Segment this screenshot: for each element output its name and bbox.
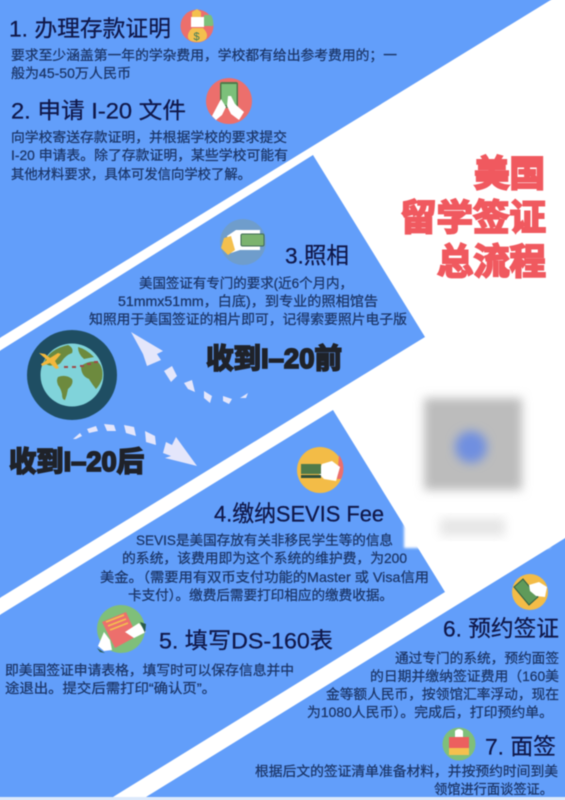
label: after I-20: 收到I–20后 bbox=[9, 446, 144, 477]
icon: filling form bbox=[97, 605, 146, 653]
text: step 1 bbox=[11, 47, 397, 81]
icon: globe with plane bbox=[27, 330, 117, 420]
text: step 3 bbox=[89, 275, 407, 327]
step 5 bbox=[5, 605, 333, 696]
panel: top blue, steps 1-2 bbox=[0, 0, 565, 344]
text: step 4: 的系统，该费用即为这个系统的维护费，为200 bbox=[122, 550, 407, 566]
text: step 5 bbox=[5, 662, 294, 696]
heading: step 2: 2. 申请 I-20 文件 bbox=[11, 98, 186, 124]
icon: money bag: $ bbox=[194, 31, 200, 43]
text: step 7: 根据后文的签证清单准备材料，并按预约时间到美 bbox=[255, 763, 558, 779]
text: step 7 bbox=[255, 763, 558, 797]
text: step 4: 美金。（需要用有双币支付功能的Master 或 Visa信用 bbox=[100, 570, 429, 585]
title: 总流程 bbox=[437, 241, 546, 282]
step 1 bbox=[9, 9, 397, 81]
label: before I-20: 收到I–20前 bbox=[206, 343, 342, 374]
step 4 bbox=[100, 447, 429, 603]
icon: bag bbox=[442, 728, 476, 760]
icon: phone in hands bbox=[206, 78, 252, 124]
arrow: up to step 3 bbox=[131, 332, 248, 404]
icon: hand holding photo bbox=[220, 219, 266, 265]
text: step 2: 其他材料要求，具体可发信向学校了解。 bbox=[11, 166, 251, 182]
icon: cash in hand bbox=[512, 574, 548, 610]
panel: middle blue, step 3 bbox=[0, 155, 425, 604]
text: step 4: 卡支付）。缴费后需要打印相应的缴费收据。 bbox=[128, 587, 393, 603]
text: step 1: 要求至少涵盖第一年的学杂费用，学校都有给出参考费用的；一 bbox=[11, 47, 397, 64]
text: step 6 bbox=[307, 650, 559, 720]
QR code area (blurred) bbox=[404, 392, 550, 548]
text: step 3: 美国签证有专门的要求(近6个月内， bbox=[139, 275, 353, 291]
heading: step 4: 4.缴纳SEVIS Fee bbox=[214, 502, 384, 526]
text: step 2: 向学校寄送存款证明，并根据学校的要求提交 bbox=[11, 129, 287, 145]
title: 美国 bbox=[474, 153, 545, 194]
text: step 6: 通过专门的系统，预约面签 bbox=[395, 650, 559, 666]
text: step 6: 金等额人民币，按领馆汇率浮动，现在 bbox=[326, 686, 559, 702]
text: step 5: 即美国签证申请表格，填写时可以保存信息并中 bbox=[5, 662, 294, 678]
text: step 3: 51mmx51mm，白底)，到专业的照相馆告 bbox=[118, 294, 378, 309]
icon: credit card bbox=[297, 447, 343, 493]
panel: lower-right blue, steps 6-7 bbox=[146, 532, 565, 797]
text: step 3: 知照用于美国签证的相片即可，记得索要照片电子版 bbox=[89, 311, 407, 327]
step 3 bbox=[89, 219, 407, 327]
icon: money bag bbox=[180, 9, 214, 43]
heading: step 7: 7. 面签 bbox=[485, 734, 556, 760]
step 2 bbox=[11, 78, 288, 182]
text: step 4: SEVIS是美国存放有关非移民学生等的信息 bbox=[136, 532, 393, 548]
heading: step 3: 3.照相 bbox=[285, 244, 349, 268]
heading: step 5: 5. 填写DS-160表 bbox=[159, 628, 333, 654]
text: step 4 bbox=[100, 532, 429, 603]
text: step 5: 途退出。提交后需打印“确认页”。 bbox=[5, 680, 216, 696]
text: step 7: 领馆进行面谈签证。 bbox=[434, 781, 553, 797]
step 6 bbox=[307, 574, 559, 720]
title: 留学签证 bbox=[400, 197, 546, 238]
text: step 6: 为1080人民币）。完成后，打印预约单。 bbox=[307, 704, 553, 720]
heading: step 6: 6. 预约签证 bbox=[443, 616, 559, 642]
text: step 6: 的日期并缴纳签证费用（160美 bbox=[370, 668, 559, 684]
text: step 1: 般为45-50万人民币 bbox=[11, 66, 131, 81]
heading: step 1: 1. 办理存款证明 bbox=[9, 16, 171, 42]
arrow: down to step 4 bbox=[73, 424, 197, 466]
text: step 2: I-20 申请表。除了存款证明，某些学校可能有 bbox=[11, 147, 288, 163]
step 7 bbox=[255, 728, 558, 797]
panel: lower-left blue, steps 4-5 bbox=[0, 410, 445, 797]
bottom edge strip bbox=[0, 797, 565, 800]
text: step 2 bbox=[11, 129, 288, 182]
title bbox=[400, 153, 546, 282]
